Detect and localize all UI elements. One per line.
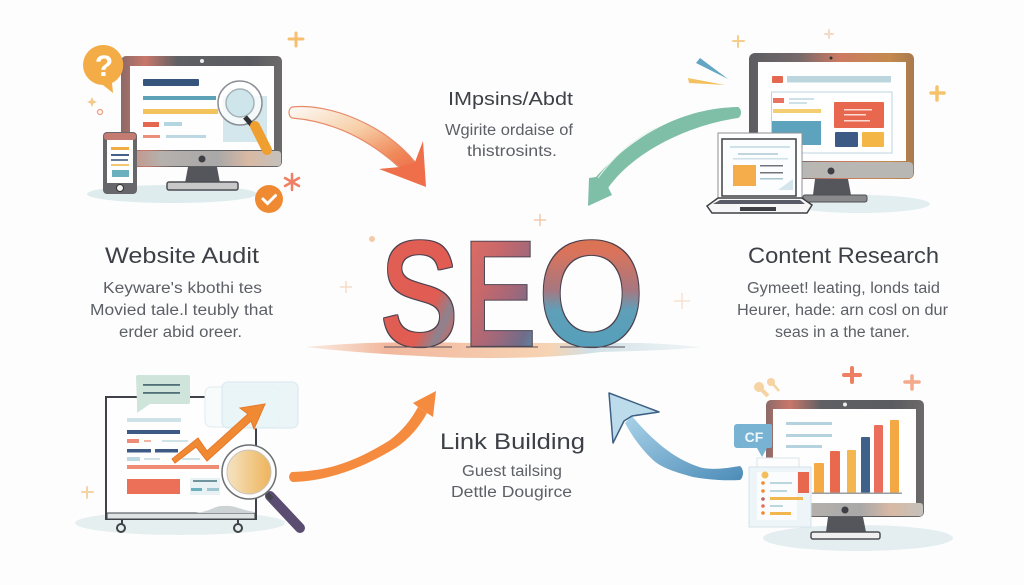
shadow under board bbox=[75, 511, 285, 535]
letter S: S bbox=[380, 212, 457, 375]
text block: website audit: erder abid oreer. bbox=[119, 324, 242, 341]
shadow under monitor bbox=[790, 195, 930, 213]
letter O: O bbox=[539, 212, 643, 375]
icon: CF speech bubble bbox=[734, 424, 772, 457]
icon: phone bbox=[103, 132, 137, 194]
icon: sparkle bbox=[82, 487, 93, 498]
shadow under monitor bbox=[763, 525, 953, 551]
icon: check badge bbox=[255, 185, 283, 213]
panel: website audit illustration bbox=[83, 33, 303, 213]
heading: website audit: Website Audit bbox=[105, 243, 259, 268]
icon: sparkles bbox=[87, 33, 303, 114]
icon: question bubble: ? bbox=[95, 50, 113, 83]
icon: sparkles bbox=[733, 30, 944, 100]
text block: content research bbox=[737, 280, 948, 341]
text block: link building: Dettle Dougirce bbox=[451, 484, 572, 501]
shadow under monitor bbox=[87, 185, 257, 203]
heading: center top: IMpsins/Abdt bbox=[448, 89, 573, 109]
arrow: blue bottom-right bbox=[609, 393, 743, 480]
text block: center top: thistrosints. bbox=[467, 143, 557, 160]
icon: asterisk bbox=[285, 174, 299, 190]
watercolour ground wash bbox=[306, 342, 701, 358]
arrow: orange bottom-left bbox=[289, 391, 436, 482]
central SEO wordmark bbox=[306, 212, 701, 376]
icon: presentation board bbox=[106, 397, 256, 532]
icon: rays bbox=[688, 58, 728, 85]
text block: content research: Gymeet! leating, londs taid bbox=[747, 280, 940, 297]
icon: pale overlapping cards bbox=[205, 382, 298, 428]
panel: content research illustration bbox=[688, 30, 944, 213]
icon: monitor bbox=[121, 56, 282, 190]
icon: monitor with bar chart bbox=[766, 400, 924, 539]
icon: speech bubble bbox=[136, 375, 190, 413]
text block: center top: Wgirite ordaise of bbox=[445, 122, 574, 139]
panel: analytics illustration bbox=[734, 368, 953, 551]
text block: website audit: Keyware's kbothi tes bbox=[103, 280, 262, 297]
arrow: red top-left bbox=[289, 107, 426, 187]
baseline strokes under letters bbox=[384, 346, 625, 348]
icon: laptop bbox=[707, 133, 812, 213]
text block: website audit: Movied tale.l teubly that bbox=[90, 302, 274, 319]
arrow: green top-right bbox=[588, 107, 741, 206]
icon: magnifier bbox=[222, 445, 300, 528]
text block: website audit bbox=[90, 280, 274, 341]
bar chart bbox=[798, 420, 902, 494]
icon: magnifier on screen bbox=[218, 81, 267, 150]
letter E: E bbox=[464, 213, 535, 376]
icon: peach keys bbox=[754, 378, 779, 396]
icon: checklist document bbox=[749, 458, 811, 527]
heading: link building: Link Building bbox=[440, 429, 585, 454]
icon: CF speech bubble: CF bbox=[745, 429, 764, 445]
sparkles around wordmark bbox=[340, 214, 690, 309]
icon: question bubble bbox=[83, 45, 123, 93]
heading: content research: Content Research bbox=[748, 243, 939, 268]
icon: rising trend arrow bbox=[172, 404, 265, 463]
icon: desktop monitor bbox=[749, 53, 914, 202]
text block: content research: seas in a the taner. bbox=[775, 324, 910, 341]
text block: center top bbox=[445, 122, 574, 160]
text block: link building: Guest tailsing bbox=[462, 463, 562, 480]
icon: plus signs bbox=[844, 368, 919, 389]
text block: link building bbox=[451, 463, 572, 501]
panel: link building illustration bbox=[75, 375, 300, 535]
text block: content research: Heurer, hade: arn cosl on dur bbox=[737, 302, 948, 319]
